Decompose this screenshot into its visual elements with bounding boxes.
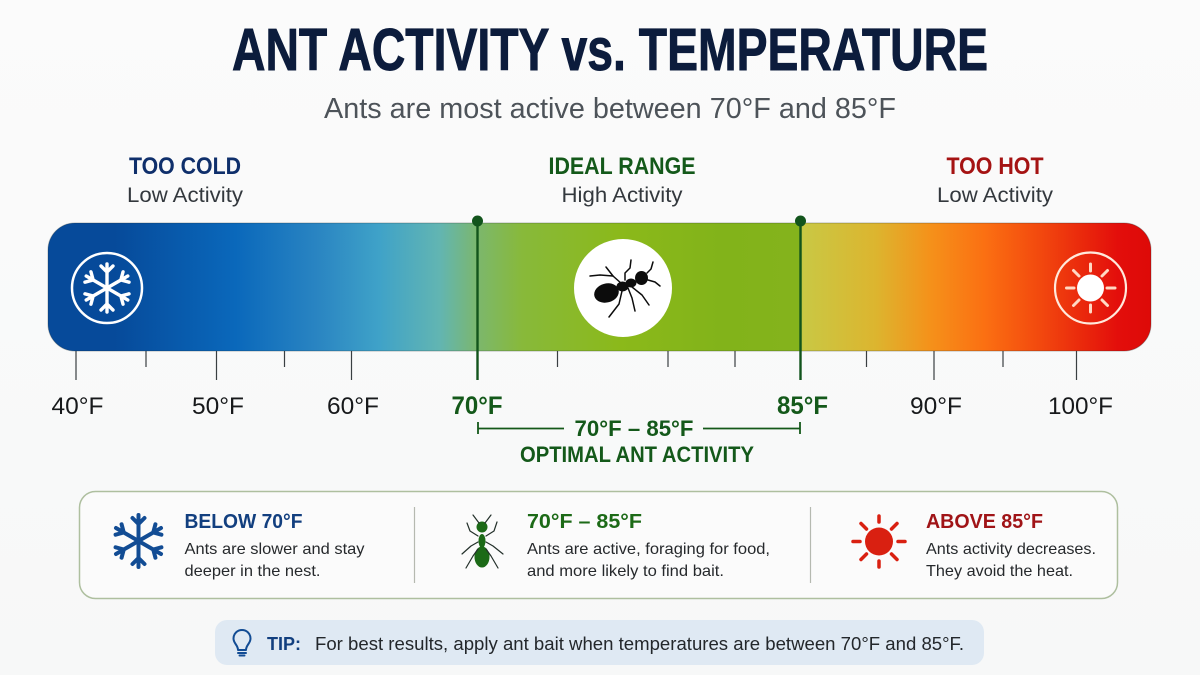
divider left [414, 507, 416, 583]
zone label: too cold: Low Activity [127, 183, 243, 207]
icon: red sun [853, 516, 905, 567]
axis labels: 50°F [192, 393, 244, 420]
text: above 85F: ABOVE 85°F [926, 511, 1043, 533]
axis labels: 40°F [52, 393, 104, 420]
text: 70F to 85F: and more likely to find bait. [527, 563, 724, 580]
axis labels: 90°F [910, 393, 962, 420]
axis labels: 60°F [327, 393, 379, 420]
zone label: ideal range: High Activity [562, 183, 683, 207]
optimal activity label: OPTIMAL ANT ACTIVITY [520, 442, 754, 467]
text: below 70F: deeper in the nest. [184, 563, 320, 580]
zone label: too hot: Low Activity [937, 183, 1053, 207]
tip text: For best results, apply ant bait when temperatures are between 70°F and 85°F. [315, 634, 964, 654]
text: below 70F [184, 511, 364, 580]
temperature gradient bar [48, 223, 1151, 351]
text: 70F to 85F: Ants are active, foraging for food, [527, 541, 770, 558]
tip label: TIP: [267, 633, 301, 654]
title: ANT ACTIVITY vs. TEMPERATURE [232, 17, 988, 83]
text: 70F to 85F: 70°F – 85°F [527, 511, 642, 533]
text: above 85F [926, 511, 1096, 580]
zone label: too hot [937, 153, 1053, 207]
icon: light bulb [234, 630, 250, 656]
icon: sun in circle [1055, 252, 1126, 324]
ideal range axis labels: 70°F [452, 392, 502, 420]
zone label: too cold: TOO COLD [129, 153, 241, 180]
icon: green ant [462, 515, 503, 568]
panel: temperature summary [80, 492, 1118, 598]
zone label: ideal range: IDEAL RANGE [548, 153, 696, 180]
tip banner [215, 620, 984, 665]
text: above 85F: They avoid the heat. [926, 563, 1073, 580]
subtitle: Ants are most active between 70°F and 85°F [324, 93, 896, 125]
ideal range axis labels [452, 392, 828, 420]
axis labels [52, 393, 1113, 420]
zone label: too cold [127, 153, 243, 207]
text: 70F to 85F [527, 511, 770, 580]
text: below 70F: BELOW 70°F [184, 511, 302, 533]
optimal range value: 70°F – 85°F [574, 416, 694, 441]
zone label: ideal range [548, 153, 696, 207]
optimal range bracket [478, 422, 800, 434]
zone label: too hot: TOO HOT [946, 153, 1044, 180]
text: below 70F: Ants are slower and stay [184, 541, 364, 558]
ideal range axis labels: 85°F [777, 392, 828, 420]
axis ticks [76, 351, 1076, 380]
icon: snowflake in circle [72, 253, 142, 323]
text: above 85F: Ants activity decreases. [926, 541, 1096, 558]
ideal range markers [472, 216, 806, 380]
divider right [810, 507, 812, 583]
icon: ant in white circle [574, 239, 672, 337]
axis labels: 100°F [1048, 393, 1113, 420]
icon: blue snowflake [113, 515, 164, 567]
